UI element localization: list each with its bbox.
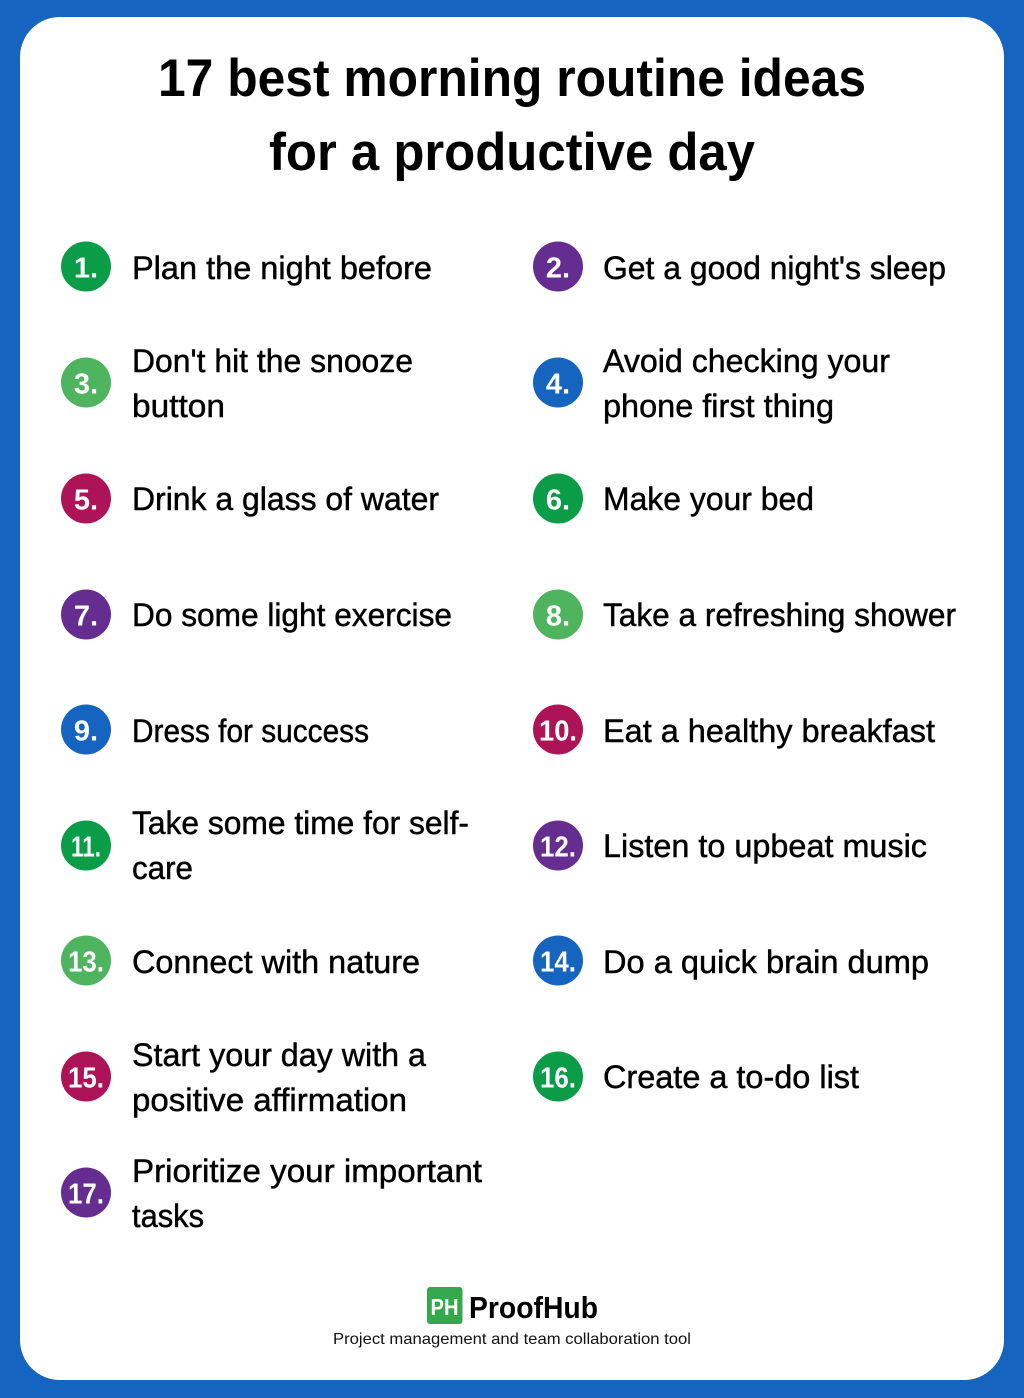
item 4: 4. — [546, 368, 570, 400]
item 14: Do a quick brain dump — [603, 944, 929, 980]
item 3: button — [132, 388, 225, 424]
item 4 — [533, 343, 890, 424]
brand name: ProofHub — [469, 1290, 598, 1325]
item 13: Connect with nature — [132, 944, 420, 980]
item 8: 8. — [546, 600, 570, 632]
item 16: 16. — [540, 1062, 576, 1094]
item 11: Take some time for self- — [132, 805, 469, 841]
item 5: Drink a glass of water — [132, 481, 439, 517]
item 10: Eat a healthy breakfast — [603, 713, 935, 749]
item 16 — [533, 1052, 859, 1102]
item 7: Do some light exercise — [132, 597, 452, 633]
item 12: Listen to upbeat music — [603, 828, 927, 864]
item 8 — [533, 590, 956, 640]
item 11: 11. — [71, 832, 101, 864]
item 15: 15. — [68, 1062, 104, 1094]
item 9: 9. — [74, 716, 98, 748]
title: for a productive day — [269, 123, 755, 182]
item 3: Don't hit the snooze — [132, 343, 413, 379]
item 12: 12. — [540, 832, 576, 864]
item 6: Make your bed — [603, 481, 814, 517]
item 13 — [61, 936, 420, 986]
item 14: 14. — [540, 946, 576, 978]
title — [158, 49, 866, 182]
item 10 — [533, 704, 935, 754]
item 17 — [61, 1153, 482, 1234]
item 15 — [61, 1037, 426, 1118]
item 4: phone first thing — [603, 388, 834, 424]
item 16: Create a to-do list — [603, 1059, 859, 1095]
tagline: Project management and team collaboration tool — [333, 1331, 691, 1348]
item 14 — [533, 936, 929, 986]
item 4: Avoid checking your — [603, 343, 890, 379]
footer logo — [427, 1287, 598, 1325]
icon: ProofHub logo mark — [427, 1287, 462, 1324]
item 10: 10. — [539, 716, 577, 748]
item 11 — [61, 805, 469, 886]
item 15: positive affirmation — [132, 1082, 407, 1118]
item 13: 13. — [68, 946, 104, 978]
item 9: Dress for success — [132, 713, 369, 749]
item 5 — [61, 474, 439, 524]
item 3: 3. — [74, 368, 98, 400]
title: 17 best morning routine ideas — [158, 49, 866, 108]
item 1: 1. — [74, 252, 98, 284]
item 7 — [61, 590, 452, 640]
item 2: Get a good night's sleep — [603, 250, 946, 286]
item 12 — [533, 820, 927, 870]
item 1: Plan the night before — [132, 250, 432, 286]
item 2: 2. — [546, 252, 570, 284]
item 17: tasks — [132, 1198, 204, 1234]
item 17: Prioritize your important — [132, 1153, 482, 1189]
item 17: 17. — [68, 1178, 104, 1210]
item 8: Take a refreshing shower — [603, 597, 956, 633]
item 11: care — [132, 850, 193, 886]
item 3 — [61, 343, 413, 424]
item 15: Start your day with a — [132, 1037, 426, 1073]
item 7: 7. — [74, 600, 98, 632]
item 6 — [533, 474, 814, 524]
item 9 — [61, 704, 369, 754]
item 5: 5. — [74, 484, 98, 516]
item 6: 6. — [546, 484, 570, 516]
icon: ProofHub logo mark: PH — [430, 1294, 458, 1320]
item 2 — [533, 242, 946, 292]
item 1 — [61, 242, 432, 292]
